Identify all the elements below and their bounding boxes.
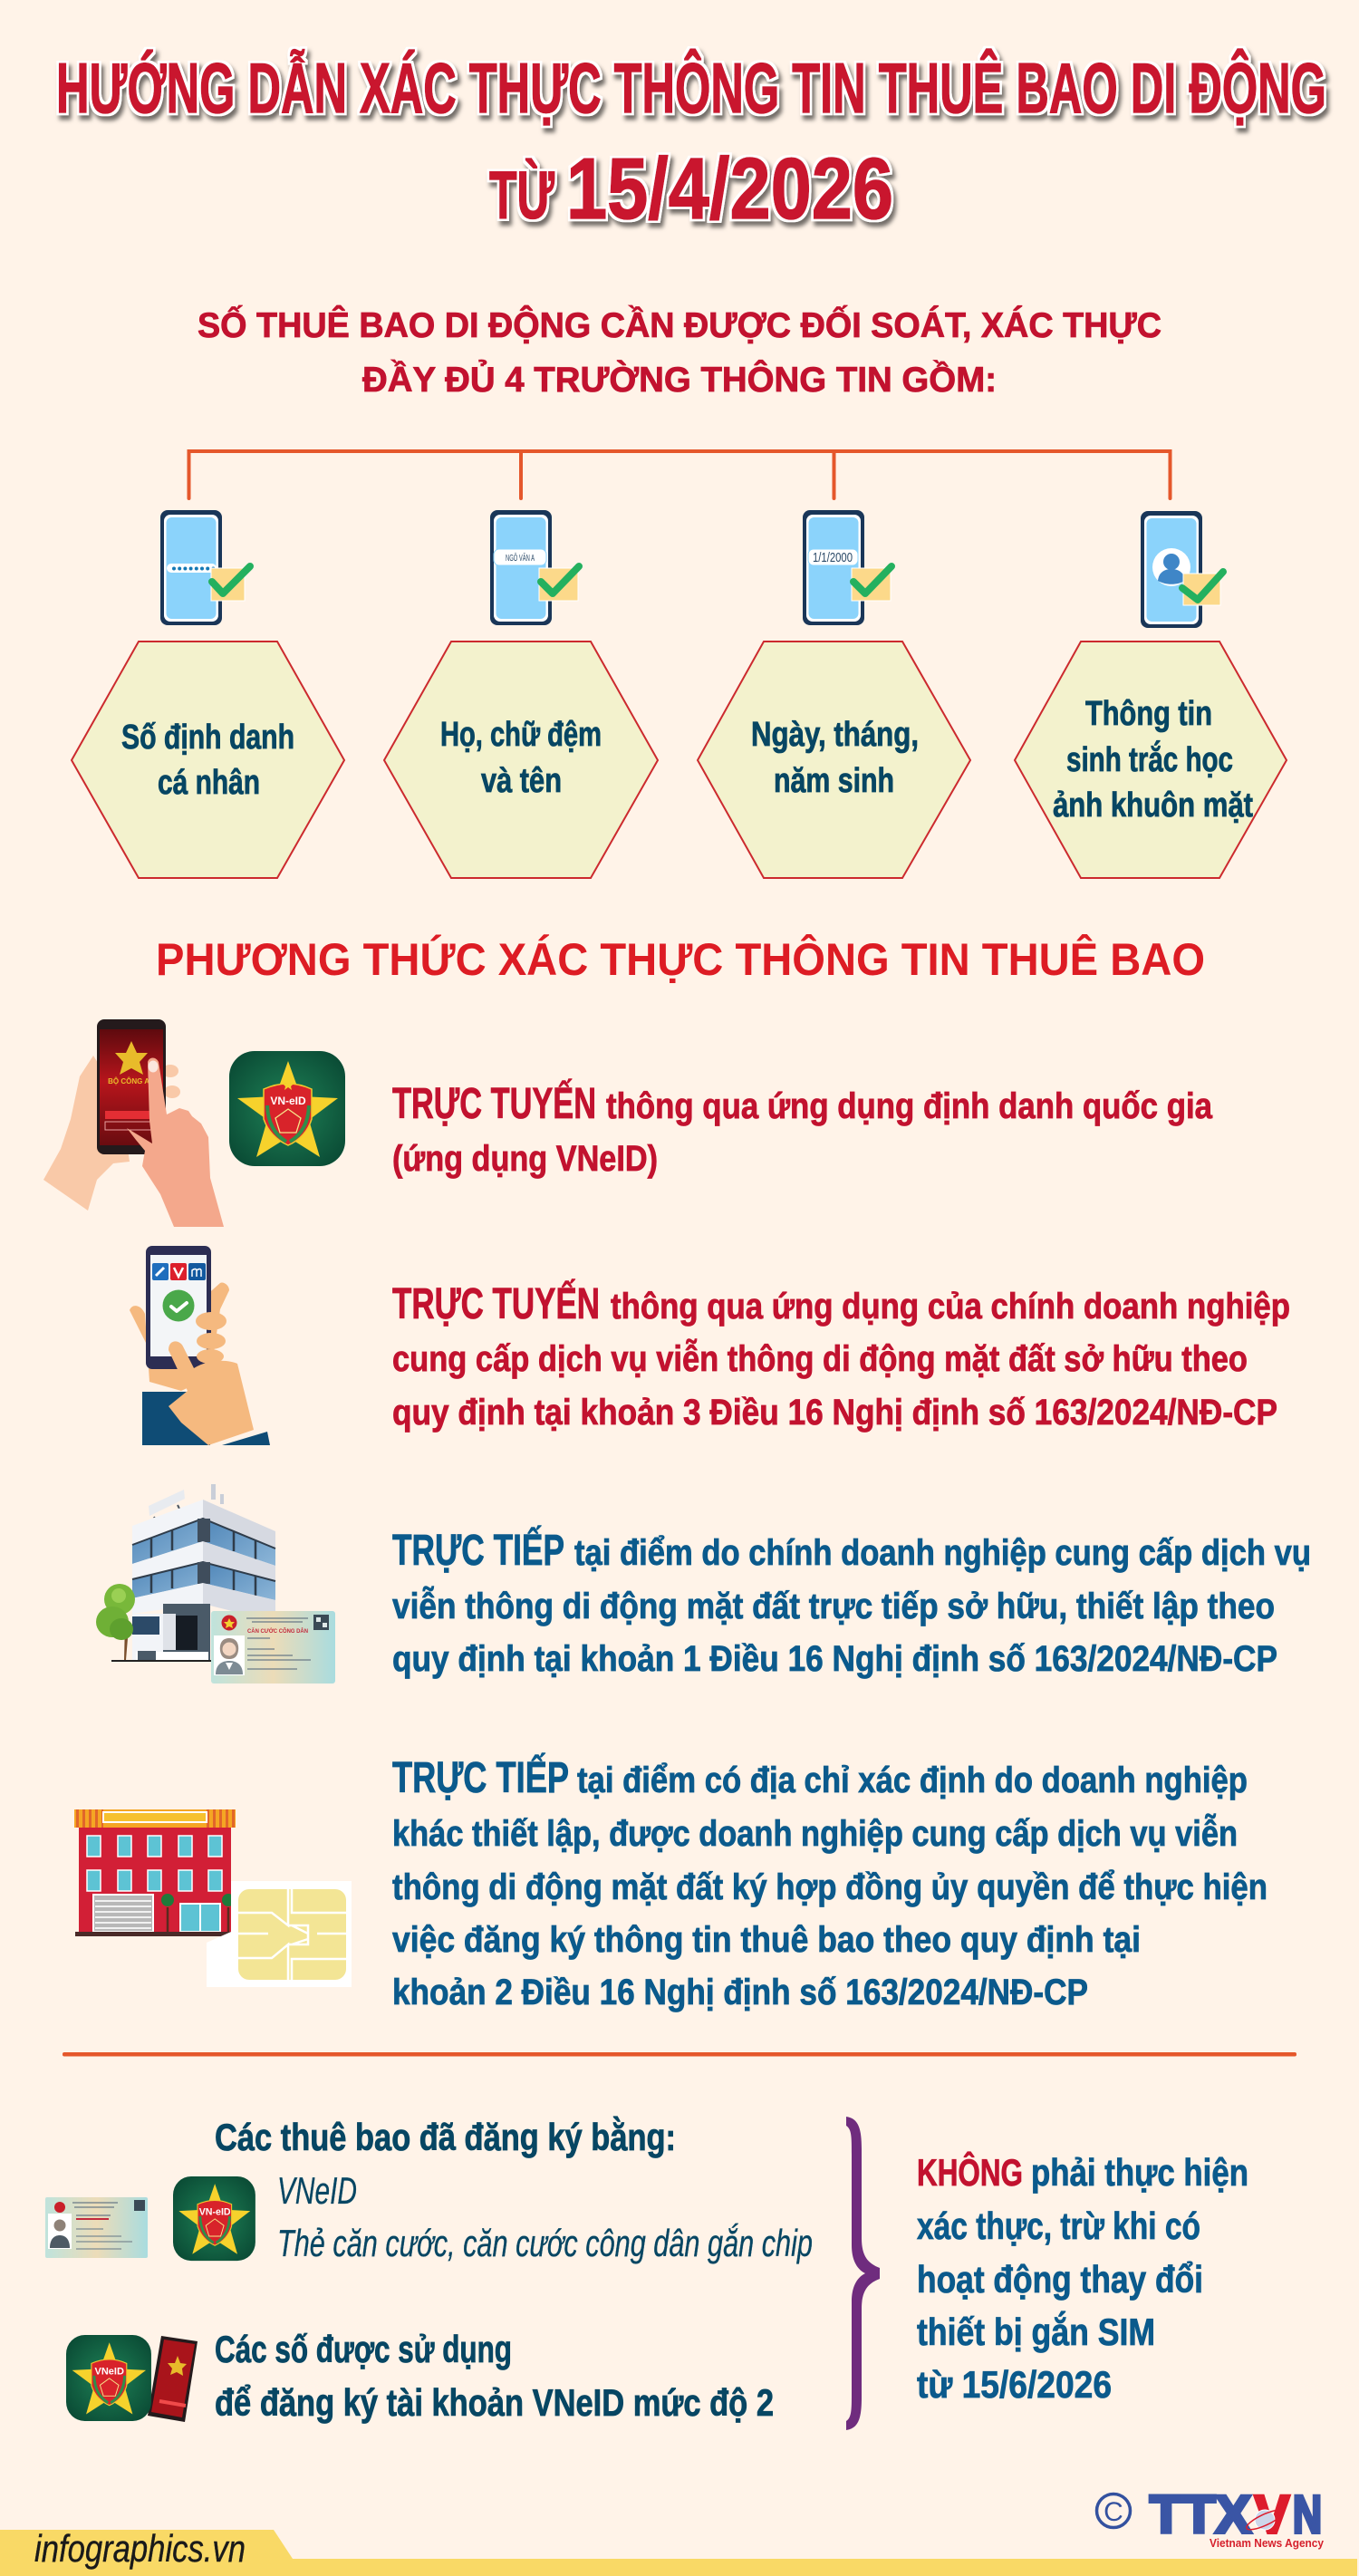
text: conclusion: phải thực hiện bbox=[1031, 2151, 1248, 2194]
method 3 bbox=[96, 1484, 1311, 1684]
hexagon: số định danh: cá nhân bbox=[158, 764, 260, 802]
icon: brace bbox=[846, 2117, 880, 2430]
text: method 4: TRỰC TIẾP bbox=[392, 1753, 569, 1802]
hexagon: sinh trắc học: sinh trắc học bbox=[1066, 739, 1233, 779]
text: method 4: tại điểm có địa chỉ xác định do doanh nghiệp bbox=[577, 1761, 1248, 1800]
logo: TTXVN: TTX bbox=[1150, 2485, 1251, 2544]
text: method 2 bbox=[392, 1279, 1290, 1433]
icon: phone with portrait bbox=[1141, 511, 1223, 628]
hexagon: sinh trắc học bbox=[1015, 642, 1287, 878]
text: method 4: việc đăng ký thông tin thuê bao theo quy định tại bbox=[392, 1920, 1141, 1960]
icon: SIM chip bbox=[207, 1881, 352, 1987]
icon: phone with date: 1/1/2000 bbox=[813, 550, 853, 565]
method 1 bbox=[43, 1019, 1213, 1227]
text: method 2: TRỰC TUYẾN bbox=[392, 1279, 600, 1328]
icon: office building with ID card: CĂN CƯỚC CÔNG DÂN bbox=[247, 1626, 308, 1635]
icon: hand holding phone with telecom apps bbox=[130, 1246, 270, 1445]
text: method 3: TRỰC TIẾP bbox=[392, 1526, 564, 1575]
text: method 1: TRỰC TUYẾN bbox=[392, 1079, 596, 1128]
text: conclusion: từ 15/6/2026 bbox=[917, 2363, 1112, 2406]
method 4 bbox=[74, 1753, 1267, 2012]
text: numbers used for level 2: để đăng ký tài khoản VNeID mức độ 2 bbox=[215, 2381, 774, 2424]
icon: small ID card bbox=[45, 2197, 148, 2258]
text: method 4: khác thiết lập, được doanh nghiệp cung cấp dịch vụ viễn bbox=[392, 1812, 1238, 1854]
hexagon: số định danh: Số định danh bbox=[121, 719, 294, 757]
divider bbox=[63, 2052, 1296, 2057]
text: method 1: (ứng dụng VNeID) bbox=[392, 1139, 658, 1179]
icon: phone with ID dots bbox=[160, 510, 250, 625]
icon: phone with name bbox=[490, 510, 579, 625]
hexagon: số định danh bbox=[72, 642, 344, 878]
text: conclusion: thiết bị gắn SIM bbox=[917, 2310, 1155, 2353]
logo: TTXVN: Vietnam News Agency bbox=[1210, 2536, 1325, 2550]
subtitle: ĐẦY ĐỦ 4 TRƯỜNG THÔNG TIN GỒM: bbox=[362, 359, 997, 400]
text: method 1: thông qua ứng dụng định danh quốc gia bbox=[606, 1086, 1213, 1126]
hexagon: ngày tháng năm sinh: năm sinh bbox=[774, 762, 894, 800]
footer band bbox=[0, 2527, 1357, 2576]
text: method 4 bbox=[392, 1753, 1267, 2012]
text: method 1 bbox=[392, 1079, 1213, 1179]
connector lines bbox=[188, 451, 1171, 498]
icon: VNeID app small: VN-eID bbox=[199, 2206, 231, 2218]
field 2: full name bbox=[384, 510, 658, 878]
heading: methods: PHƯƠNG THỨC XÁC THỰC THÔNG TIN THUÊ BAO bbox=[156, 933, 1205, 985]
icon: VNeID app second bbox=[66, 2335, 151, 2421]
panel: exempt subscribers bbox=[45, 2115, 1248, 2430]
hexagon: họ chữ đệm và tên: Họ, chữ đệm bbox=[440, 716, 602, 754]
text: conclusion: KHÔNG bbox=[917, 2150, 1023, 2194]
logo: TTXVN: V bbox=[1255, 2485, 1289, 2544]
hexagon: họ chữ đệm và tên: và tên bbox=[481, 762, 562, 800]
method 2 bbox=[130, 1246, 1290, 1445]
hexagon: sinh trắc học: ảnh khuôn mặt bbox=[1053, 786, 1253, 825]
icon: VNeID app small bbox=[173, 2176, 255, 2261]
title bbox=[56, 48, 1326, 237]
icon: hands holding phone: BỘ CÔNG AN bbox=[108, 1077, 155, 1085]
icon: VNeID app second: VNeID bbox=[94, 2366, 124, 2377]
icon: phone with date bbox=[803, 510, 892, 625]
field 3: date of birth bbox=[698, 510, 970, 878]
text: method 4: khoản 2 Điều 16 Nghị định số 163/2024/NĐ-CP bbox=[392, 1973, 1088, 2012]
text: numbers used for level 2: Các số được sử dụng bbox=[215, 2328, 512, 2370]
text: registered by: Các thuê bao đã đăng ký bằng: bbox=[215, 2115, 676, 2158]
text: VNeID and ID card list: Thẻ căn cước, căn cước công dân gắn chip bbox=[277, 2222, 813, 2264]
text: conclusion: hoạt động thay đổi bbox=[917, 2258, 1203, 2301]
field 4: biometrics bbox=[1015, 511, 1287, 878]
title: TỪ bbox=[489, 158, 554, 233]
panel: four information fields bbox=[72, 510, 1287, 878]
logo: TTXVN: N bbox=[1293, 2485, 1322, 2544]
icon: phone with name: NGÔ VĂN A bbox=[506, 552, 535, 564]
logo: TTXVN: C bbox=[1104, 2497, 1123, 2527]
icon: office building with ID card bbox=[96, 1484, 335, 1684]
subtitle bbox=[198, 304, 1161, 400]
hexagon: họ chữ đệm và tên bbox=[384, 642, 658, 878]
text: method 2: cung cấp dịch vụ viễn thông di động mặt đất sở hữu theo bbox=[392, 1337, 1248, 1379]
hexagon: sinh trắc học: Thông tin bbox=[1085, 695, 1212, 733]
icon: VNeID app bbox=[229, 1051, 345, 1166]
title: 15/4/2026 bbox=[566, 140, 893, 237]
logo: TTXVN bbox=[1096, 2485, 1325, 2550]
icon: shop building bbox=[74, 1809, 236, 1936]
text: website: infographics.vn bbox=[34, 2527, 246, 2570]
text: VNeID and ID card list: VNeID bbox=[277, 2169, 357, 2212]
hexagon: ngày tháng năm sinh: Ngày, tháng, bbox=[751, 716, 919, 754]
text: method 3 bbox=[392, 1526, 1311, 1679]
icon: VNeID phone bbox=[148, 2336, 198, 2422]
text: conclusion: xác thực, trừ khi có bbox=[917, 2205, 1200, 2247]
subtitle: SỐ THUÊ BAO DI ĐỘNG CẦN ĐƯỢC ĐỐI SOÁT, XÁC THỰC bbox=[198, 304, 1161, 345]
text: conclusion bbox=[917, 2150, 1248, 2406]
text: numbers used for level 2 bbox=[215, 2328, 774, 2424]
icon: hands holding phone bbox=[43, 1019, 224, 1227]
icon: VNeID app: VN-eID bbox=[270, 1095, 306, 1107]
field 1: personal ID bbox=[72, 510, 344, 878]
hexagon: ngày tháng năm sinh bbox=[698, 642, 970, 878]
text: VNeID and ID card list bbox=[277, 2169, 813, 2264]
